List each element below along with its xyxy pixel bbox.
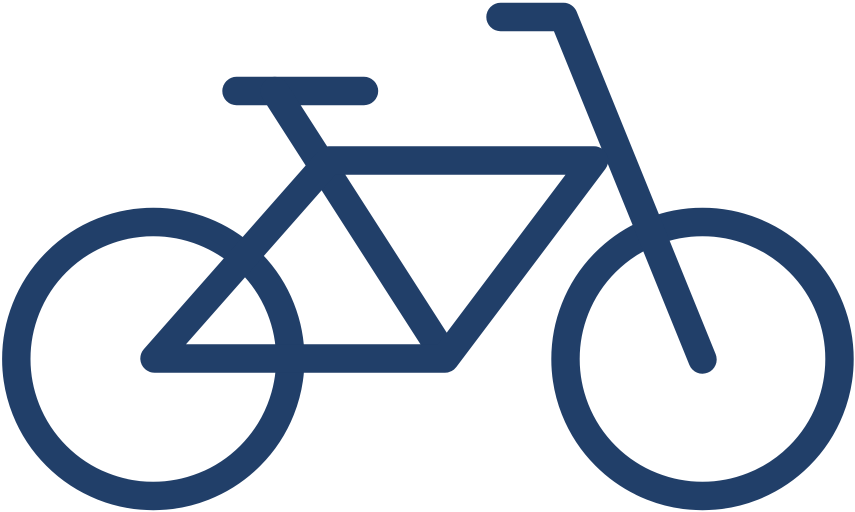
- bicycle frame: [154, 160, 594, 358]
- seat post and seat tube: [275, 91, 442, 352]
- handlebar and fork: [500, 17, 702, 360]
- saddle: [236, 77, 364, 105]
- rear wheel: [16, 222, 290, 496]
- front wheel: [566, 222, 840, 496]
